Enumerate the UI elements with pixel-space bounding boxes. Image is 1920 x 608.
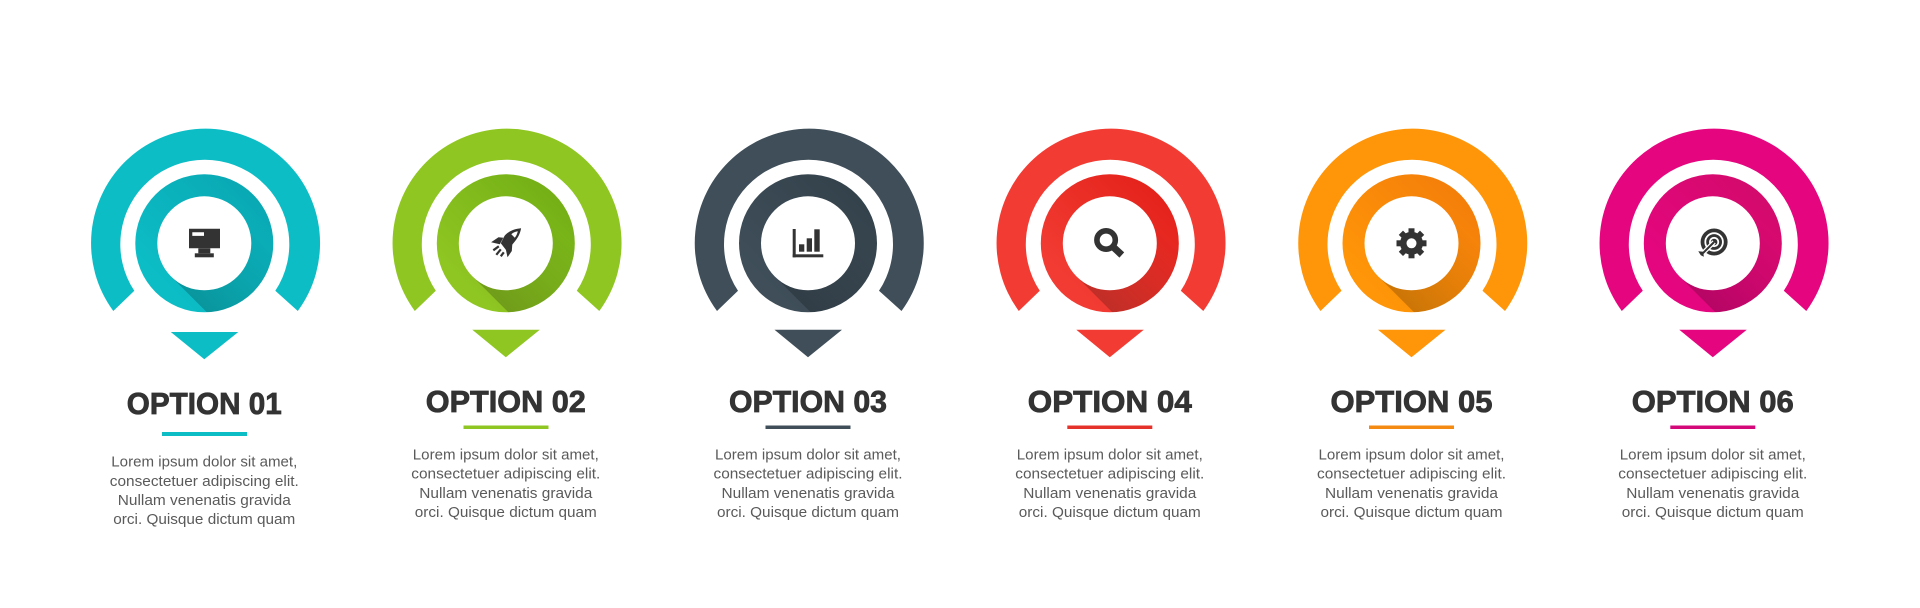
white centre bbox=[157, 196, 251, 290]
white centre bbox=[1666, 196, 1760, 290]
ring long shadow bbox=[1379, 250, 1476, 312]
pointer triangle bbox=[774, 330, 842, 357]
title 06: OPTION 06 bbox=[1632, 385, 1794, 419]
body text 05: orci. Quisque dictum quam bbox=[1320, 504, 1502, 521]
title 05: OPTION 05 bbox=[1330, 385, 1493, 419]
pin graphic 03 bbox=[695, 129, 924, 357]
white centre bbox=[1364, 196, 1458, 290]
underline 02 bbox=[464, 426, 548, 429]
icon: monitor bbox=[189, 229, 220, 257]
underline 04 bbox=[1067, 426, 1152, 429]
icon: bar chart bbox=[793, 229, 823, 257]
body text 03: Lorem ipsum dolor sit amet, bbox=[715, 446, 901, 464]
body text 02: Lorem ipsum dolor sit amet, bbox=[413, 446, 599, 464]
body text 01 bbox=[110, 454, 299, 528]
panel: option 04 bbox=[997, 129, 1226, 521]
body text 06: Lorem ipsum dolor sit amet, bbox=[1620, 446, 1806, 464]
panel: option 06 bbox=[1600, 129, 1829, 521]
inner ring bbox=[1342, 174, 1480, 312]
body text 06: Nullam venenatis gravida bbox=[1626, 485, 1800, 502]
outer arc bbox=[91, 129, 320, 311]
body text 06 bbox=[1618, 446, 1807, 521]
ring long shadow bbox=[1076, 252, 1174, 312]
outer arc bbox=[1600, 129, 1829, 311]
panel: option 01 bbox=[91, 129, 320, 528]
body text 04: orci. Quisque dictum quam bbox=[1019, 504, 1201, 521]
pin graphic 01 bbox=[91, 129, 320, 359]
icon: target bbox=[1698, 228, 1728, 257]
body text 01: orci. Quisque dictum quam bbox=[113, 511, 295, 528]
body text 01: Lorem ipsum dolor sit amet, bbox=[111, 454, 297, 471]
pin graphic 02 bbox=[393, 129, 622, 357]
body text 04: Lorem ipsum dolor sit amet, bbox=[1017, 446, 1203, 464]
outer arc bbox=[997, 129, 1226, 311]
ring long shadow bbox=[1680, 253, 1776, 312]
icon: rocket bbox=[491, 228, 521, 257]
body text 05: consectetuer adipiscing elit. bbox=[1317, 466, 1506, 482]
body text 04 bbox=[1015, 446, 1204, 521]
title 04: OPTION 04 bbox=[1028, 385, 1192, 419]
outer arc bbox=[1298, 129, 1527, 311]
title 02: OPTION 02 bbox=[426, 385, 586, 419]
inner ring bbox=[437, 174, 575, 312]
icon: magnifier bbox=[1097, 231, 1122, 255]
body text 06: consectetuer adipiscing elit. bbox=[1618, 466, 1807, 482]
body text 04: consectetuer adipiscing elit. bbox=[1015, 466, 1204, 482]
body text 03: orci. Quisque dictum quam bbox=[717, 504, 899, 521]
inner ring bbox=[739, 174, 877, 312]
pin graphic 06 bbox=[1600, 129, 1829, 357]
white centre bbox=[1063, 196, 1157, 290]
title 01: OPTION 01 bbox=[127, 387, 282, 421]
panel: option 02 bbox=[393, 129, 622, 521]
outer arc bbox=[695, 129, 924, 311]
inner ring bbox=[1644, 174, 1782, 312]
title 03: OPTION 03 bbox=[729, 385, 887, 419]
body text 05 bbox=[1317, 446, 1506, 521]
underline 06 bbox=[1670, 426, 1755, 429]
pointer triangle bbox=[171, 332, 238, 359]
underline 01 bbox=[162, 432, 247, 436]
underline 03 bbox=[766, 426, 850, 429]
ring long shadow bbox=[473, 257, 568, 312]
inner ring bbox=[1041, 174, 1179, 312]
body text 01: consectetuer adipiscing elit. bbox=[110, 473, 299, 490]
ring long shadow bbox=[778, 279, 855, 312]
inner ring bbox=[135, 174, 273, 312]
body text 02: Nullam venenatis gravida bbox=[419, 485, 593, 502]
body text 02 bbox=[411, 446, 600, 521]
panel: option 05 bbox=[1298, 129, 1527, 521]
white centre bbox=[459, 196, 553, 290]
body text 05: Nullam venenatis gravida bbox=[1325, 485, 1499, 502]
body text 05: Lorem ipsum dolor sit amet, bbox=[1318, 446, 1504, 464]
white centre bbox=[761, 196, 855, 290]
ring long shadow bbox=[171, 256, 266, 312]
body text 02: consectetuer adipiscing elit. bbox=[411, 466, 600, 482]
body text 06: orci. Quisque dictum quam bbox=[1622, 504, 1804, 521]
pointer triangle bbox=[1679, 330, 1747, 357]
panel: option 03 bbox=[695, 129, 924, 521]
body text 02: orci. Quisque dictum quam bbox=[415, 504, 597, 521]
icon: gear bbox=[1396, 228, 1426, 258]
pointer triangle bbox=[472, 330, 540, 357]
pointer triangle bbox=[1076, 330, 1144, 357]
body text 01: Nullam venenatis gravida bbox=[118, 492, 291, 509]
pointer triangle bbox=[1378, 330, 1446, 357]
body text 03: Nullam venenatis gravida bbox=[722, 485, 895, 502]
pin graphic 04 bbox=[997, 129, 1226, 357]
body text 03: consectetuer adipiscing elit. bbox=[714, 466, 902, 482]
pin graphic 05 bbox=[1298, 129, 1527, 357]
body text 03 bbox=[714, 446, 902, 521]
outer arc bbox=[393, 129, 622, 311]
body text 04: Nullam venenatis gravida bbox=[1023, 485, 1197, 502]
underline 05 bbox=[1369, 426, 1454, 429]
